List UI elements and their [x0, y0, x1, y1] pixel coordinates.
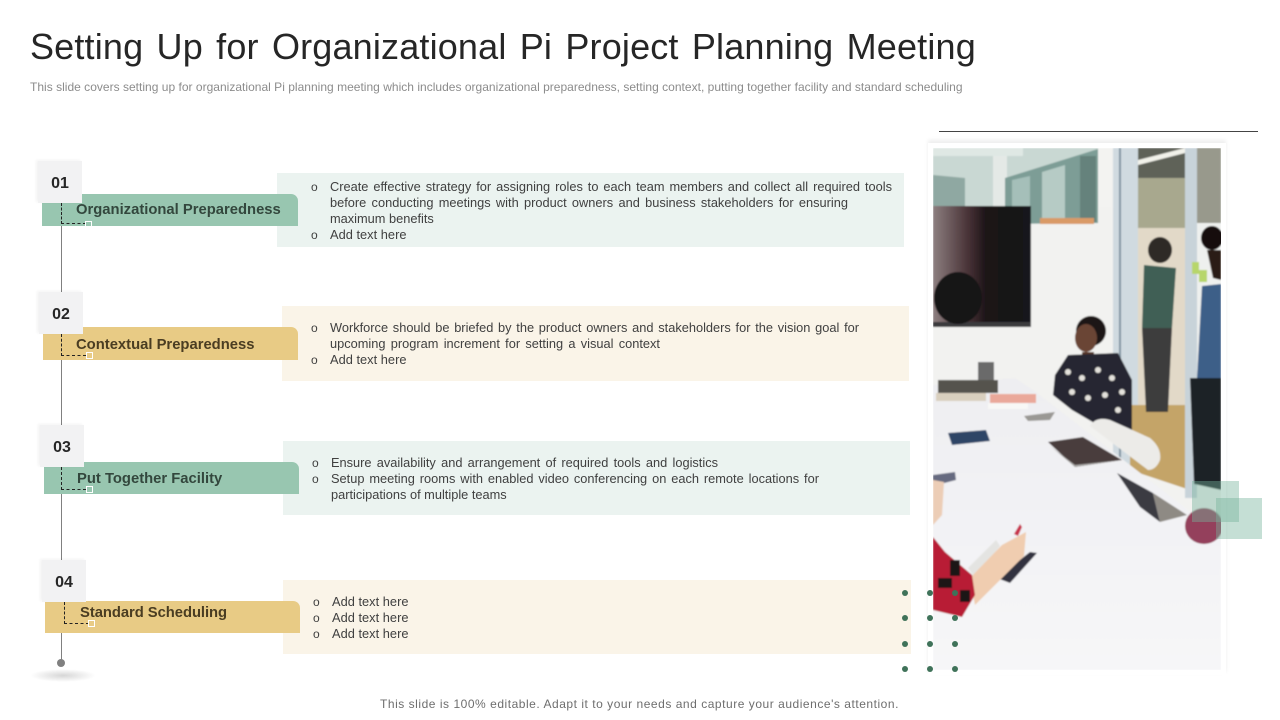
subtitle: This slide covers setting up for organizational Pi planning meeting which includes organizational preparedness, setting context, putting together facility and standard scheduling	[30, 80, 963, 94]
step 1 bullet text: Create effective strategy for assigning roles to each team members and collect all required tools	[330, 179, 892, 194]
number 03	[40, 425, 84, 467]
rule above photo	[939, 131, 1258, 132]
step 4 bullet text: Add text here	[332, 626, 409, 641]
step 3 bullet text: o	[312, 472, 319, 486]
step 3 bullet text: Setup meeting rooms with enabled video conferencing on each remote locations for	[331, 471, 819, 486]
panel: step 2 description	[282, 306, 909, 381]
label: contextual preparedness	[43, 327, 298, 360]
timeline line	[61, 200, 62, 663]
label text: Put Together Facility	[77, 471, 222, 487]
connector node 3	[86, 486, 93, 493]
connector node 2	[86, 352, 93, 359]
step 2 bullet text: upcoming program increment for setting a visual context	[330, 336, 660, 351]
step 2 bullet text: o	[311, 321, 318, 335]
photo frame	[928, 143, 1226, 675]
number 04: 04	[55, 574, 73, 591]
step 4 bullet text: o	[313, 627, 320, 641]
panel: step 1 description	[277, 173, 904, 247]
step 2 bullet text: Workforce should be briefed by the product owners and stakeholders for the vision goal for	[330, 320, 859, 335]
step 1 bullet text: Add text here	[330, 227, 407, 242]
label: put together facility	[44, 462, 299, 494]
step 1 bullet text: before conducting meetings with product owners and business stakeholders for ensuring	[330, 195, 848, 210]
number 02	[39, 292, 83, 334]
step 3 bullet text: participations of multiple teams	[331, 487, 507, 502]
number 02: 02	[52, 306, 70, 323]
step 3 bullet text	[312, 455, 819, 502]
timeline shadow	[30, 669, 96, 682]
timeline end dot	[57, 659, 65, 667]
step 1 bullet text: o	[311, 228, 318, 242]
number 01: 01	[51, 175, 69, 192]
step 2 bullet text	[311, 320, 859, 367]
footer note: This slide is 100% editable. Adapt it to your needs and capture your audience's attention.	[380, 697, 899, 711]
label text: Contextual Preparedness	[76, 337, 254, 353]
label: standard scheduling	[45, 601, 300, 633]
step 1 bullet text: o	[311, 180, 318, 194]
label text: Organizational Preparedness	[76, 202, 281, 218]
dashed connector 4	[64, 602, 89, 624]
panel: step 4 description	[283, 580, 911, 654]
number 04	[42, 560, 86, 602]
step 3 bullet text: Ensure availability and arrangement of required tools and logistics	[331, 455, 718, 470]
photo: meeting room	[933, 148, 1221, 669]
step 1 bullet text: maximum benefits	[330, 211, 434, 226]
step 1 bullet text	[311, 179, 892, 242]
dashed connector 3	[61, 467, 86, 490]
step 4 bullet text: o	[313, 595, 320, 609]
title: Setting Up for Organizational Pi Project Planning Meeting	[30, 26, 976, 67]
label text: Standard Scheduling	[80, 605, 227, 621]
step 4 bullet text: o	[313, 611, 320, 625]
connector node 4	[88, 620, 95, 627]
panel: step 3 description	[283, 441, 910, 515]
number 03: 03	[53, 439, 71, 456]
dashed connector 2	[61, 334, 86, 356]
step 4 bullet text: Add text here	[332, 610, 409, 625]
connector node 1	[85, 221, 92, 228]
step 2 bullet text: o	[311, 353, 318, 367]
step 4 bullet text: Add text here	[332, 594, 409, 609]
step 3 bullet text: o	[312, 456, 319, 470]
step 2 bullet text: Add text here	[330, 352, 407, 367]
dashed connector 1	[61, 203, 86, 224]
step 4 bullet text	[313, 594, 409, 641]
number 01	[38, 161, 82, 203]
label: organizational preparedness	[42, 194, 298, 226]
